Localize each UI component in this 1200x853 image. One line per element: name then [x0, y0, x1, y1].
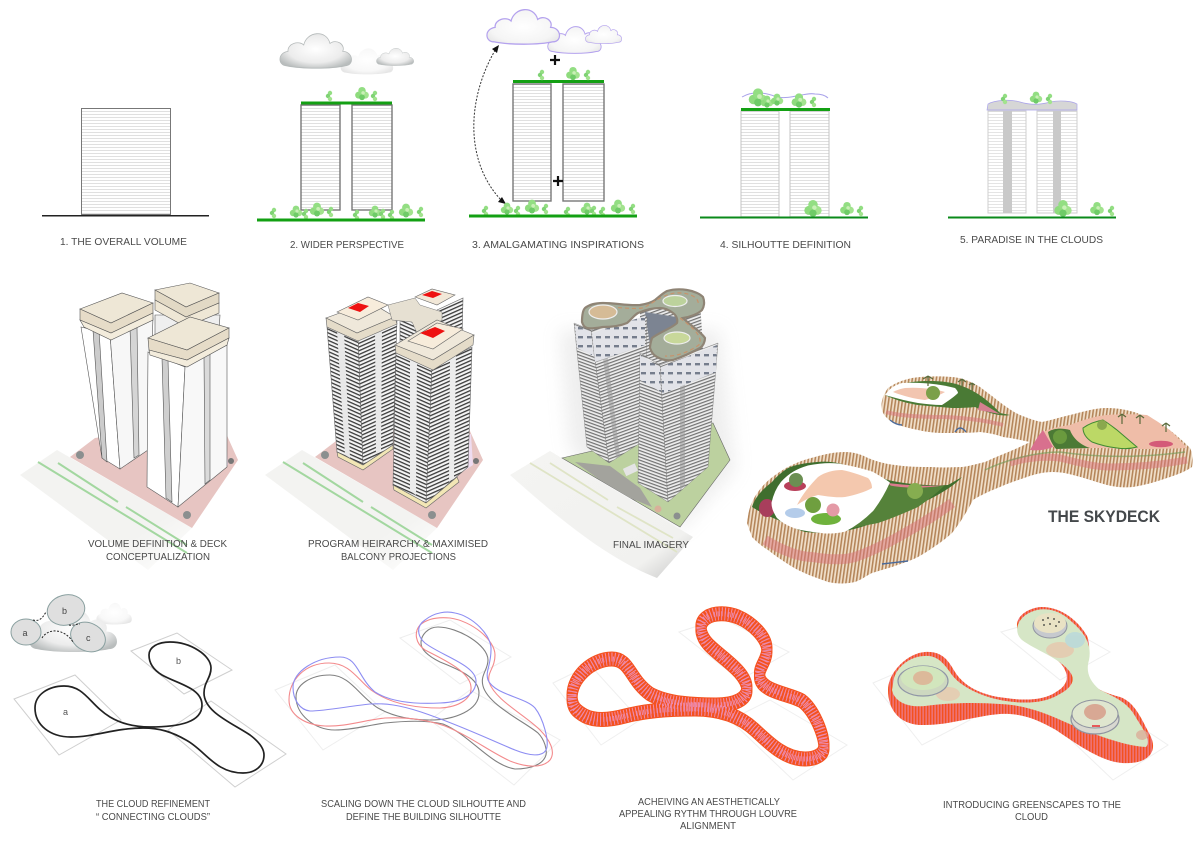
road	[510, 451, 693, 578]
connected cloud outline	[35, 642, 264, 773]
site plan	[265, 420, 483, 570]
panel: the cloud refinement	[11, 591, 286, 823]
underside accents	[882, 420, 966, 564]
towers	[301, 105, 392, 210]
cloud key diagram	[11, 591, 132, 657]
caption: INTRODUCING GREENSCAPES TO THE	[943, 800, 1121, 811]
landscaped base	[562, 423, 730, 527]
ground trees	[270, 203, 423, 220]
roof ribbon deck	[582, 289, 705, 360]
caption line 2: BALCONY PROJECTIONS	[341, 552, 456, 563]
caption: 5. PARADISE IN THE CLOUDS	[960, 235, 1103, 246]
grey silhouette	[296, 627, 546, 769]
caption line 2: CLOUD	[1015, 812, 1048, 823]
tower volume	[82, 108, 170, 214]
caption line 2: DEFINE THE BUILDING SILHOUTTE	[346, 812, 501, 823]
back tower	[400, 289, 463, 420]
panel: 4. silhoutte definition	[700, 88, 868, 251]
plus sign: nature	[553, 176, 563, 186]
green banding on wall	[985, 452, 1185, 470]
red silhouette	[289, 618, 552, 766]
heading: the skydeck: THE SKYDECK	[1048, 508, 1160, 526]
caption line 2: CONCEPTUALIZATION	[106, 552, 210, 563]
soft shadow	[560, 330, 735, 530]
panel: greenscapes	[873, 607, 1168, 823]
panel: 1. the overall volume	[42, 108, 209, 248]
red roof: left	[348, 303, 369, 312]
back tower	[155, 283, 220, 400]
tower core strips	[1003, 111, 1061, 213]
entry drive	[575, 462, 652, 507]
ground trees	[482, 200, 635, 217]
ground line	[257, 218, 425, 222]
louvre wall	[888, 607, 1153, 763]
roof trees	[749, 88, 816, 108]
zone letter b: b	[176, 656, 181, 666]
towers	[741, 111, 829, 217]
roof trees	[1001, 92, 1052, 104]
sky deck line	[301, 102, 392, 104]
sky deck line	[513, 80, 604, 83]
caption: ACHEIVING AN AESTHETICALLY	[638, 797, 780, 808]
ground trees	[804, 200, 863, 217]
circular deck: right lobe	[1071, 700, 1119, 734]
panel: volume definition and deck	[20, 283, 238, 570]
back tower	[640, 300, 708, 440]
blue silhouette	[293, 612, 547, 755]
right lobe deck	[1030, 414, 1187, 450]
faint zone outlines	[873, 618, 1168, 780]
ground line	[700, 216, 868, 218]
caption: SCALING DOWN THE CLOUD SILHOUTTE AND	[321, 799, 526, 810]
caption: VOLUME DEFINITION & DECK	[88, 539, 227, 550]
sky bridge	[388, 298, 442, 335]
back lobe deck	[885, 376, 1010, 415]
towers	[988, 111, 1077, 213]
faint zone outlines	[553, 618, 847, 780]
pink banding on wall	[765, 412, 1187, 559]
louvre ribbon	[572, 612, 824, 761]
left tower	[326, 297, 397, 470]
left tower	[80, 293, 153, 469]
dashed double arrow	[474, 45, 506, 204]
panel: 2. wider perspective	[257, 34, 425, 251]
panel: program hierarchy	[265, 289, 488, 570]
red roof: front	[420, 327, 445, 338]
panel: 3. amalgamating inspirations	[469, 10, 644, 251]
ground line	[42, 215, 209, 216]
sky deck line	[741, 108, 830, 111]
cloud key diagram: b	[62, 606, 67, 616]
faint zone outlines	[275, 620, 560, 785]
circular deck: left lobe	[898, 666, 948, 696]
ground line	[469, 214, 637, 218]
plus sign: cloud	[550, 55, 560, 65]
site details	[623, 463, 680, 520]
ground trees	[1054, 200, 1114, 217]
roof trees	[538, 67, 590, 80]
panel: louvre alignment	[553, 612, 847, 832]
caption line 2: “ CONNECTING CLOUDS”	[96, 812, 210, 823]
garden patches	[936, 632, 1148, 740]
landscaped deck	[892, 609, 1148, 747]
zone letter a: a	[63, 707, 68, 717]
panel: final imagery	[510, 289, 735, 578]
caption: 3. AMALGAMATING INSPIRATIONS	[472, 240, 644, 251]
panel: the skydeck render	[747, 376, 1193, 584]
left tower	[574, 316, 647, 463]
site plan	[20, 420, 238, 570]
circular deck: back lobe	[1033, 613, 1067, 638]
cloud key diagram: c	[86, 633, 91, 643]
caption line 3: ALIGNMENT	[680, 821, 736, 832]
cloud key diagram: a	[22, 628, 28, 638]
caption: 4. SILHOUTTE DEFINITION	[720, 240, 851, 251]
caption: FINAL IMAGERY	[613, 540, 689, 551]
cloud deck	[987, 100, 1077, 110]
panel: 5. paradise in the clouds	[948, 92, 1116, 246]
caption: PROGRAM HEIRARCHY & MAXIMISED	[308, 539, 488, 550]
caption: 2. WIDER PERSPECTIVE	[290, 240, 404, 251]
panel: scaling down silhouette	[275, 612, 560, 823]
towers	[513, 84, 604, 201]
front tower	[638, 343, 718, 502]
front tower	[147, 317, 229, 507]
cloud silhouette line	[742, 93, 828, 98]
zone outlines	[14, 633, 286, 787]
clouds	[487, 10, 622, 53]
caption: 1. THE OVERALL VOLUME	[60, 237, 187, 248]
left lobe deck	[752, 462, 962, 533]
front tower	[393, 320, 474, 508]
roof trees	[326, 87, 377, 101]
ground line	[948, 216, 1116, 218]
road markings	[530, 463, 677, 552]
red roof: back	[422, 291, 442, 298]
caption: THE CLOUD REFINEMENT	[96, 799, 210, 810]
louvred silhouette	[747, 376, 1193, 584]
caption line 2: APPEALING RYTHM THROUGH LOUVRE	[619, 809, 797, 820]
clouds	[280, 34, 414, 74]
